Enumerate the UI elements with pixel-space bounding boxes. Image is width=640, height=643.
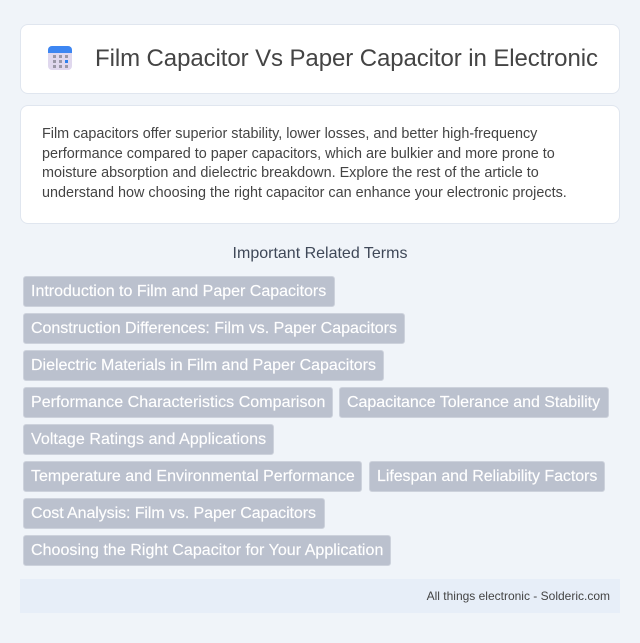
tag xyxy=(23,461,362,492)
intro text panel: Film capacitors offer superior stability, lower losses, and better high-frequency xyxy=(42,126,537,142)
title: Film Capacitor Vs Paper Capacitor in Electronic xyxy=(95,45,598,72)
tag: Dielectric Materials in Film and Paper Capacitors xyxy=(31,357,376,374)
tag: Cost Analysis: Film vs. Paper Capacitors xyxy=(31,505,316,522)
tag: Introduction to Film and Paper Capacitors xyxy=(31,283,326,300)
tag xyxy=(23,276,335,307)
tag: Capacitance Tolerance and Stability xyxy=(347,394,600,411)
intro text panel xyxy=(20,105,620,224)
intro text panel: moisture absorption and dielectric breakdown. Explore the rest of the article to xyxy=(42,165,539,181)
tag: Temperature and Environmental Performance xyxy=(31,468,355,485)
intro text panel: performance compared to paper capacitors, which are bulkier and more prone to xyxy=(42,146,555,162)
header panel xyxy=(20,24,620,94)
icon: calendar xyxy=(48,46,72,70)
tag: Choosing the Right Capacitor for Your Application xyxy=(31,542,383,559)
intro text panel: understand how choosing the right capacitor can enhance your electronic projects. xyxy=(42,185,567,201)
tag xyxy=(339,387,609,418)
tag xyxy=(23,424,274,455)
tag xyxy=(23,498,325,529)
footer: All things electronic - Solderic.com xyxy=(427,589,610,603)
tag xyxy=(23,535,391,566)
tag: Voltage Ratings and Applications xyxy=(31,431,266,448)
tag xyxy=(23,350,384,381)
tag: Lifespan and Reliability Factors xyxy=(377,468,597,485)
tag xyxy=(369,461,605,492)
heading: related terms: Important Related Terms xyxy=(233,245,407,262)
tag xyxy=(23,313,405,344)
tag: Construction Differences: Film vs. Paper Capacitors xyxy=(31,320,397,337)
tag list xyxy=(23,276,609,566)
tag: Performance Characteristics Comparison xyxy=(31,394,325,411)
footer xyxy=(20,579,620,613)
tag xyxy=(23,387,333,418)
